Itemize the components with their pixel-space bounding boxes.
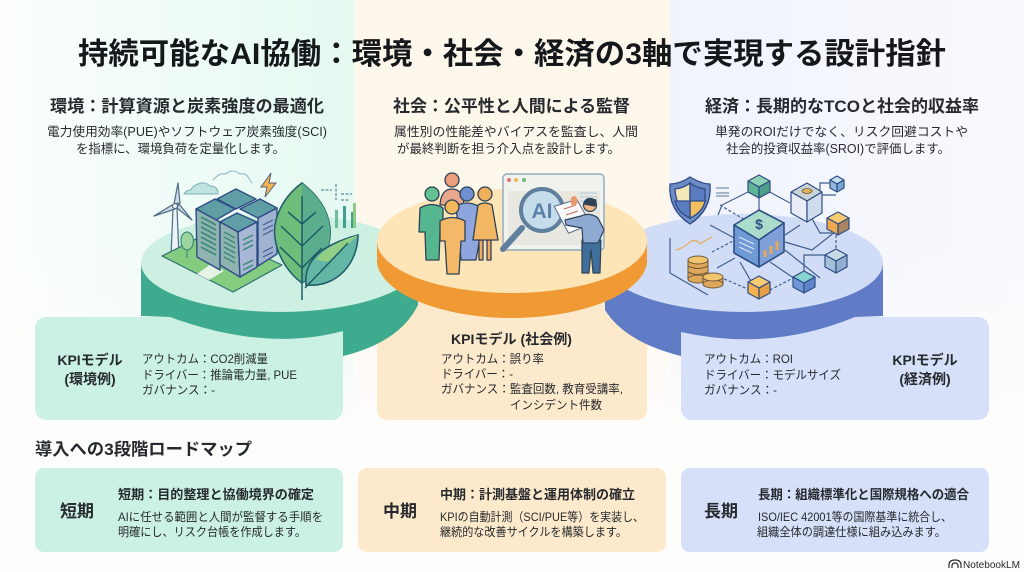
heading: environment KPI: [57, 352, 123, 387]
text: long term description: [757, 509, 952, 539]
text: society description: が最終判断を担う介入点を設計します。: [397, 141, 620, 156]
text: medium term description: [440, 509, 644, 539]
heading: short term: 短期：目的整理と協働境界の確定: [118, 487, 314, 502]
server: right: [240, 199, 277, 266]
heading: economy: 経済：長期的なTCOと社会的収益率: [705, 97, 979, 116]
cube: document: [791, 183, 822, 222]
icon: people group: [419, 173, 498, 274]
disc: society platform: [377, 189, 647, 318]
panel: environment KPI: [35, 317, 343, 420]
cube: orange top right: [827, 212, 849, 235]
text: long term description: ISO/IEC 42001等の国際基準に統合し、: [758, 509, 952, 524]
text: society KPI list: アウトカム：誤り率: [441, 352, 544, 366]
heading: economy KPI: (経済例): [899, 371, 951, 387]
server: front: [220, 213, 257, 277]
server: back: [217, 189, 256, 209]
text: long term description: 組織全体の調達仕様に組み込みます。: [757, 525, 946, 539]
text: environment KPI list: [142, 351, 297, 397]
person: woman: [473, 187, 498, 260]
panel: society KPI: [377, 290, 647, 420]
heading: environment KPI: KPIモデル: [57, 352, 123, 368]
heading: economy KPI: KPIモデル: [892, 352, 958, 368]
text: economy description: 社会的投資収益率(SROI)で評価します。: [726, 141, 950, 156]
text: environment description: を指標に、環境負荷を定量化します。: [76, 141, 285, 156]
text: medium term description: KPIの自動計測（SCI/PUE等）を実装し、: [440, 509, 644, 524]
label: medium term: 中期: [383, 502, 417, 521]
cube: small blue: [830, 176, 844, 192]
icon: central dollar cube: $: [755, 216, 763, 232]
icon: small leaf: [305, 235, 358, 288]
panel: economy KPI: [681, 317, 989, 420]
text: economy KPI list: ドライバー：モデルサイズ: [704, 367, 841, 382]
icon: tree: [181, 232, 193, 258]
heading: environment: 環境：計算資源と炭素強度の最適化: [50, 96, 324, 116]
cube: patterned: [825, 249, 847, 273]
disc: economy platform: [605, 214, 883, 356]
icon: chart with coins: [670, 237, 723, 295]
icon: ground: [162, 232, 282, 292]
icon: magnifying glass: [503, 189, 563, 249]
cube: green: [748, 175, 770, 198]
panel: short term: [35, 468, 343, 552]
title: 持続可能なAI協働：環境・社会・経済の3軸で実現する設計指針: [78, 38, 946, 71]
text: environment description: 電力使用効率(PUE)やソフトウェア炭素強度(SCI): [47, 124, 327, 139]
panel: long term: [681, 468, 989, 552]
icon: shield: [670, 177, 729, 224]
text: society description: 属性別の性能差やバイアスを監査し、人間: [394, 124, 638, 139]
text: environment description: [47, 124, 327, 156]
text: economy description: 単発のROIだけでなく、リスク回避コストや: [715, 125, 968, 139]
icon: inspecting man: [565, 196, 604, 273]
text: short term description: [118, 509, 323, 539]
icon: cloud: [184, 171, 252, 194]
icon: magnifying glass: AI: [532, 200, 552, 223]
text: environment KPI list: ドライバー：推論電力量, PUE: [142, 367, 297, 382]
text: economy KPI list: [704, 352, 841, 397]
text: economy KPI list: アウトカム：ROI: [704, 352, 793, 366]
text: society KPI list: ドライバー：-: [441, 367, 513, 381]
heading: environment KPI: (環境例): [64, 371, 116, 387]
heading: roadmap: 導入への3段階ロードマップ: [35, 440, 252, 459]
icon: lightning bolt: [261, 173, 276, 197]
text: society description: [394, 124, 638, 156]
icon: small bar chart: [321, 184, 356, 228]
person: pink: [440, 173, 464, 205]
text: economy description: [715, 125, 968, 156]
heading: medium term: 中期：計測基盤と運用体制の確立: [440, 487, 635, 502]
disc: environment platform: [141, 214, 419, 356]
icon: servers: [196, 189, 277, 277]
heading: economy KPI: [892, 352, 958, 387]
cube: orange bottom: [748, 276, 770, 299]
panel: society heading: [393, 97, 638, 156]
icon: checklist document: [554, 198, 591, 234]
icon: wind turbine: [154, 183, 192, 257]
cube: blue: [793, 271, 815, 293]
text: short term description: 明確にし、リスク台帳を作成します。: [118, 524, 306, 539]
text: society KPI list: ガバナンス：監査回数, 教育受講率,: [441, 381, 623, 396]
panel: medium term: [358, 468, 666, 552]
heading: society: 社会：公平性と人間による監督: [393, 97, 630, 116]
logo: NotebookLM: NotebookLM: [963, 559, 1020, 571]
text: environment KPI list: アウトカム：CO2削減量: [142, 351, 268, 366]
icon: coins: [688, 256, 723, 288]
icon: network cubes: [748, 175, 849, 299]
text: environment KPI list: ガバナンス：-: [142, 383, 215, 397]
person: green: [419, 187, 443, 260]
panel: economy heading: [705, 97, 979, 156]
label: long term: 長期: [704, 502, 738, 521]
server: left: [196, 199, 235, 270]
connector lines: [710, 183, 837, 290]
text: short term description: AIに任せる範囲と人間が監督する手順を: [118, 509, 323, 524]
heading: long term: 長期：組織標準化と国際規格への適合: [758, 487, 969, 502]
label: short term: 短期: [60, 502, 94, 521]
text: society KPI list: [441, 352, 623, 412]
icon: big leaf: [275, 183, 330, 300]
text: economy KPI list: ガバナンス：-: [704, 383, 777, 397]
panel: environment heading: [47, 96, 327, 156]
icon: central dollar cube: [734, 210, 784, 267]
person: orange: [440, 200, 465, 274]
person: blue: [456, 187, 480, 260]
icon: browser window: [503, 174, 604, 250]
text: medium term description: 継続的な改善サイクルを構築します。: [440, 524, 627, 539]
heading: society KPI: KPIモデル (社会例): [451, 331, 572, 347]
text: society KPI list: インシデント件数: [510, 397, 602, 412]
